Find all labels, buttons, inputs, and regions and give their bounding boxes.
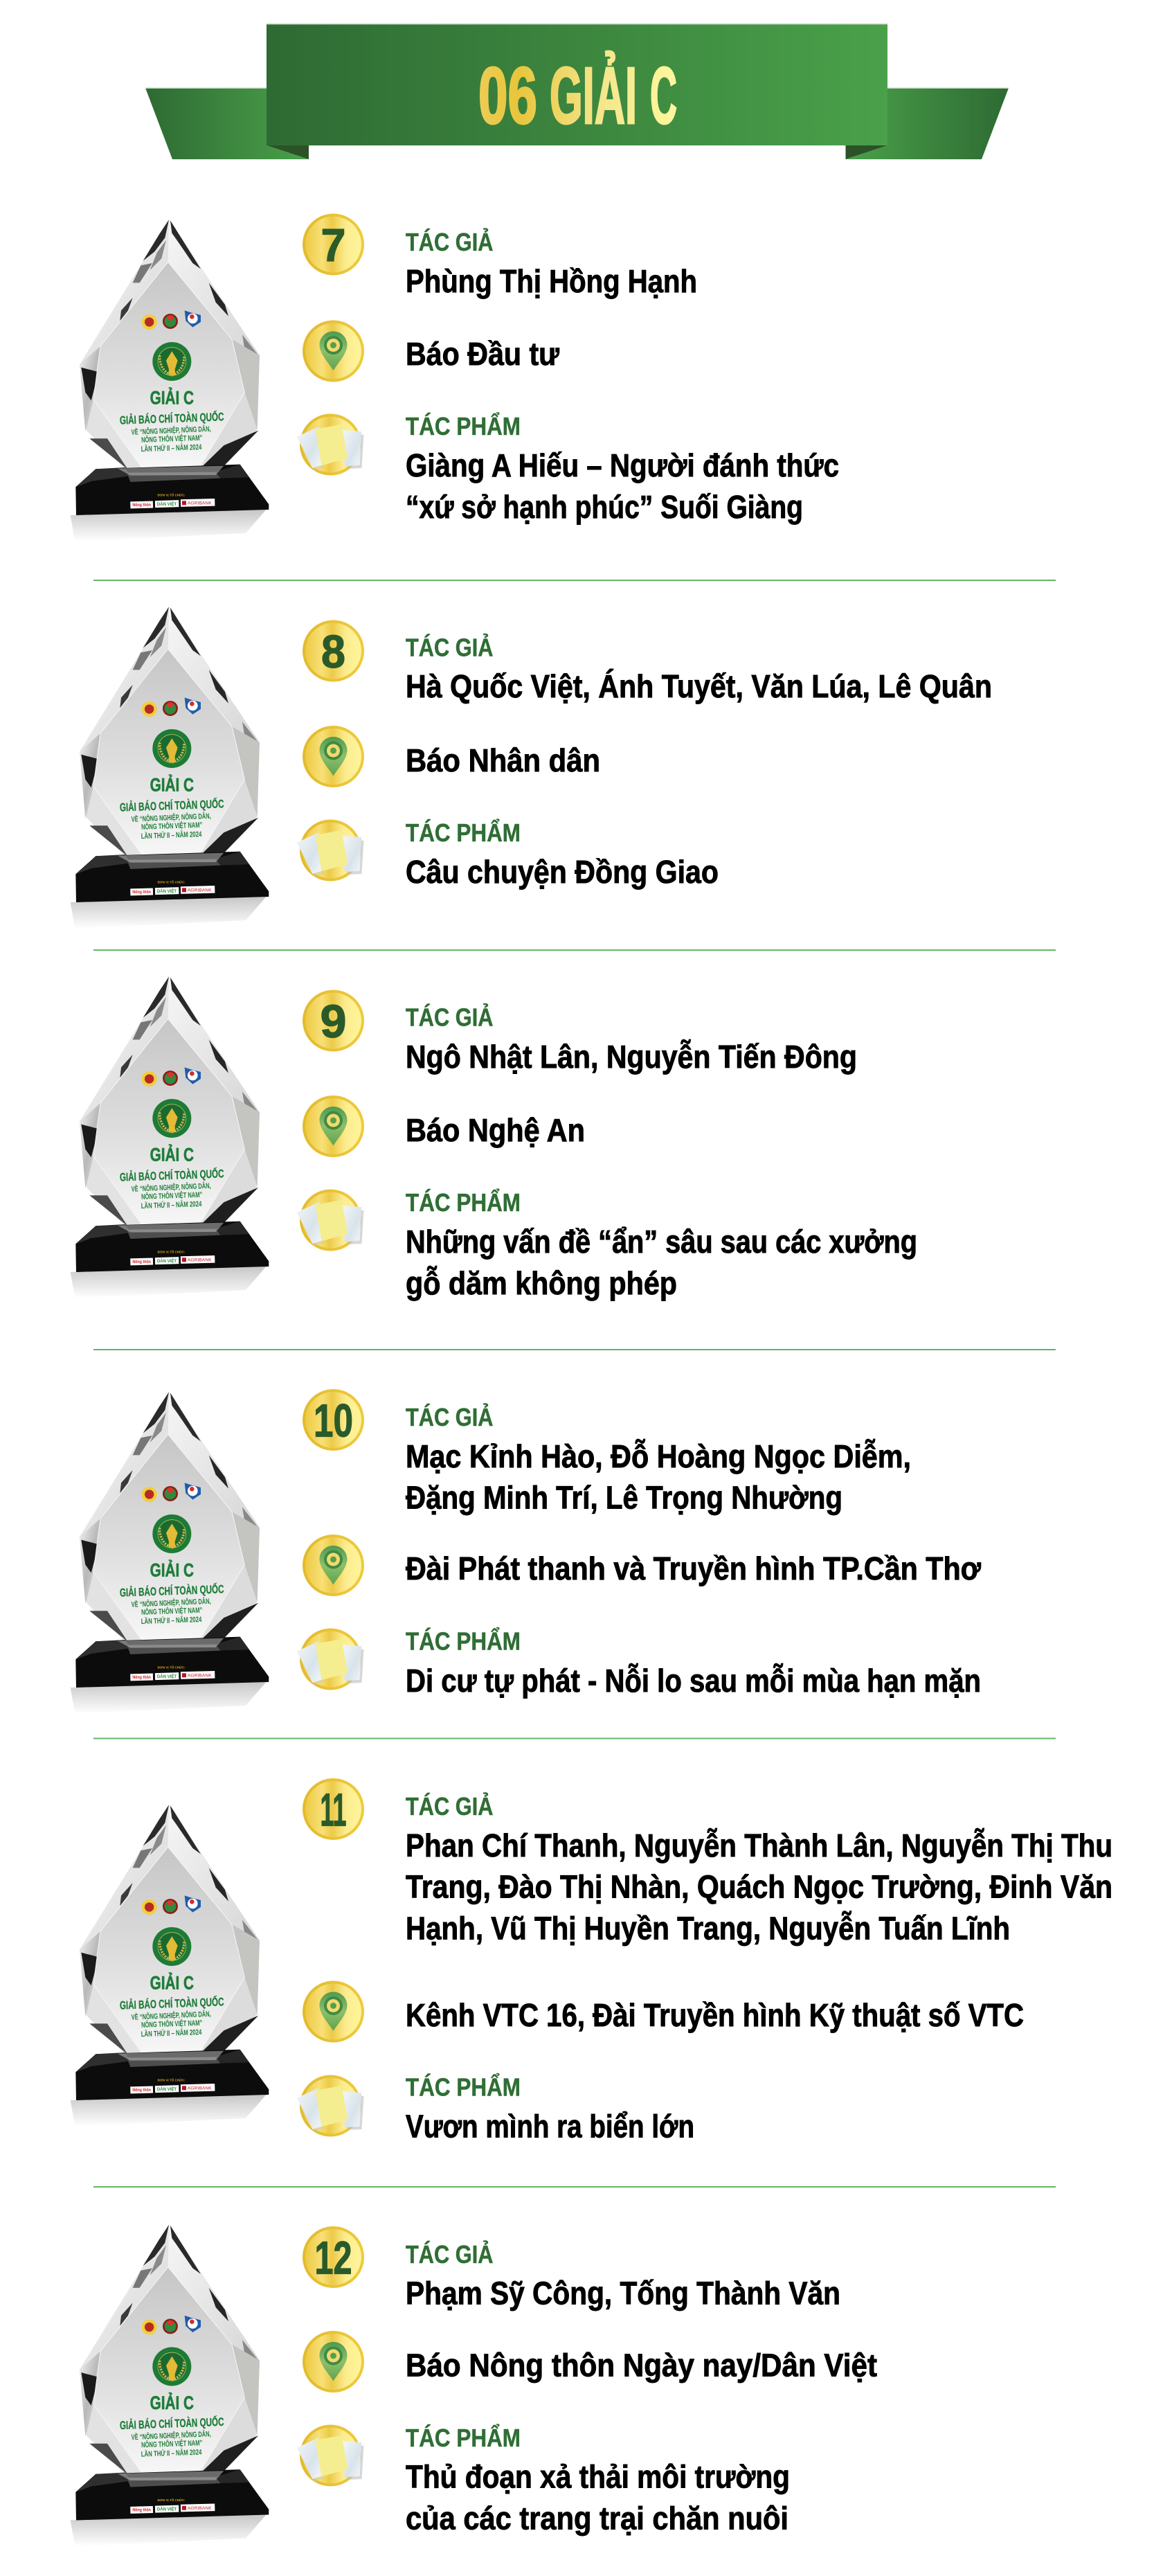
trophy 12: LẦN THỨ II – NĂM 2024 — [141, 2448, 202, 2459]
number badge 12: 12 — [314, 2233, 352, 2284]
author — [406, 1792, 1112, 1946]
title: 06 — [478, 51, 537, 141]
author: Phạm Sỹ Công, Tống Thành Văn — [406, 2275, 840, 2311]
trophy 12: DÂN VIỆT — [157, 2505, 177, 2512]
author: Mạc Kỉnh Hào, Đỗ Hoàng Ngọc Diễm, — [406, 1438, 911, 1474]
trophy 8: GIẢI BÁO CHÍ TOÀN QUỐC — [120, 796, 224, 814]
work: TÁC PHẨM — [406, 1188, 521, 1217]
trophy 12: Nông thôn — [132, 2507, 151, 2512]
title — [478, 51, 677, 141]
author: TÁC GIẢ — [406, 1003, 493, 1032]
panel: award 11 — [71, 1778, 1112, 2144]
title: GIẢI — [550, 51, 637, 141]
work — [406, 2072, 694, 2144]
trophy 11: ĐƠN VỊ TỔ CHỨC: — [158, 2078, 186, 2083]
number badge 9 — [303, 990, 364, 1051]
work: Câu chuyện Đồng Giao — [406, 854, 719, 890]
author — [406, 1403, 911, 1515]
work: Vươn mình ra biển lớn — [406, 2108, 694, 2144]
trophy 10: LẦN THỨ II – NĂM 2024 — [141, 1615, 202, 1626]
author — [406, 1003, 857, 1075]
trophy 11: AGRIBANK — [188, 2086, 212, 2091]
trophy 9: NÔNG THÔN VIỆT NAM” — [141, 1190, 203, 1201]
banner: 06 GIẢI C: C — [650, 51, 677, 141]
trophy 8: LẦN THỨ II – NĂM 2024 — [141, 830, 202, 841]
author: Đặng Minh Trí, Lê Trọng Nhường — [406, 1479, 842, 1515]
work: TÁC PHẨM — [406, 2072, 521, 2101]
number badge 11 — [303, 1778, 364, 1840]
trophy 11: NÔNG THÔN VIỆT NAM” — [141, 2019, 203, 2030]
author: Hạnh, Vũ Thị Huyền Trang, Nguyễn Tuấn Lĩnh — [406, 1910, 1010, 1946]
work — [406, 2423, 790, 2536]
author: Phùng Thị Hồng Hạnh — [406, 263, 697, 299]
trophy 7: AGRIBANK — [188, 501, 212, 506]
outlet: Báo Nhân dân — [406, 742, 600, 778]
icon: location pin — [303, 320, 364, 382]
trophy 9: Nông thôn — [132, 1260, 151, 1264]
trophy 7: NÔNG THÔN VIỆT NAM” — [141, 433, 203, 445]
trophy 9: GIẢI BÁO CHÍ TOÀN QUỐC — [120, 1166, 224, 1184]
author: TÁC GIẢ — [406, 228, 493, 256]
trophy 10: VỀ “NÔNG NGHIỆP, NÔNG DÂN, — [131, 1597, 211, 1609]
icon: location pin — [303, 1095, 364, 1157]
trophy 11: LẦN THỨ II – NĂM 2024 — [141, 2028, 202, 2039]
number badge 9: 9 — [320, 996, 346, 1048]
work: gỗ dăm không phép — [406, 1265, 677, 1301]
author: TÁC GIẢ — [406, 1403, 493, 1431]
outlet: Đài Phát thanh và Truyền hình TP.Cần Thơ — [406, 1550, 981, 1586]
trophy 9: GIẢI C — [150, 1143, 194, 1165]
trophy 7: ĐƠN VỊ TỔ CHỨC: — [158, 493, 186, 498]
work: của các trang trại chăn nuôi — [406, 2500, 788, 2536]
number badge 10: 10 — [314, 1395, 353, 1447]
trophy 12: VỀ “NÔNG NGHIỆP, NÔNG DÂN, — [131, 2429, 211, 2442]
panel: award 7 — [71, 213, 839, 542]
trophy 8: AGRIBANK — [188, 888, 212, 893]
trophy 8: VỀ “NÔNG NGHIỆP, NÔNG DÂN, — [131, 812, 211, 824]
trophy 10: GIẢI BÁO CHÍ TOÀN QUỐC — [120, 1582, 224, 1600]
right ribbon wing — [846, 87, 1009, 159]
trophy 10: NÔNG THÔN VIỆT NAM” — [141, 1606, 203, 1617]
icon: papers — [297, 414, 364, 475]
number badge 8: 8 — [321, 626, 345, 678]
icon: location pin — [303, 1980, 364, 2043]
trophy 12: AGRIBANK — [188, 2506, 212, 2511]
trophy 7: GIẢI BÁO CHÍ TOÀN QUỐC — [120, 409, 224, 427]
main ribbon — [267, 24, 887, 145]
outlet: Báo Nghệ An — [406, 1112, 585, 1148]
work: “xứ sở hạnh phúc” Suối Giàng — [406, 489, 803, 525]
number badge 10 — [303, 1389, 364, 1451]
trophy 7: VỀ “NÔNG NGHIỆP, NÔNG DÂN, — [131, 424, 211, 437]
icon: papers — [297, 820, 364, 881]
panel: award 8 — [71, 607, 992, 929]
icon: papers — [297, 1190, 364, 1251]
work: Những vấn đề “ẩn” sâu sau các xưởng — [406, 1224, 917, 1260]
panel: award 10 — [71, 1389, 981, 1714]
trophy 8 — [71, 607, 269, 929]
outlet: Kênh VTC 16, Đài Truyền hình Kỹ thuật số VTC — [406, 1997, 1024, 2033]
trophy 11 — [71, 1805, 269, 2127]
icon: papers — [297, 2075, 364, 2137]
author — [406, 633, 992, 704]
icon: location pin — [303, 726, 364, 787]
trophy 7 — [71, 220, 269, 542]
author — [406, 2240, 840, 2311]
work: Giàng A Hiếu – Người đánh thức — [406, 447, 839, 483]
trophy 8: ĐƠN VỊ TỔ CHỨC: — [158, 880, 186, 885]
trophy 12: ĐƠN VỊ TỔ CHỨC: — [158, 2498, 186, 2503]
icon: papers — [297, 2425, 364, 2486]
trophy 8: Nông thôn — [132, 890, 151, 895]
trophy 9 — [71, 976, 269, 1298]
work: Di cư tự phát - Nỗi lo sau mỗi mùa hạn mặn — [406, 1663, 981, 1699]
left ribbon wing — [145, 87, 309, 159]
work: TÁC PHẨM — [406, 818, 521, 847]
number badge 8 — [303, 620, 364, 681]
work — [406, 1626, 981, 1699]
trophy 7: DÂN VIỆT — [157, 501, 177, 507]
icon: papers — [297, 1629, 364, 1690]
number badge 7 — [303, 213, 364, 276]
trophy 9: LẦN THỨ II – NĂM 2024 — [141, 1199, 202, 1210]
trophy 8: DÂN VIỆT — [157, 888, 177, 894]
trophy 11: Nông thôn — [132, 2088, 151, 2093]
work: Thủ đoạn xả thải môi trường — [406, 2458, 790, 2494]
author — [406, 228, 697, 299]
trophy 9: VỀ “NÔNG NGHIỆP, NÔNG DÂN, — [131, 1181, 211, 1194]
banner: 06 GIẢI C — [145, 24, 1009, 159]
trophy 9: AGRIBANK — [188, 1258, 212, 1263]
author: Hà Quốc Việt, Ánh Tuyết, Văn Lúa, Lê Quân — [406, 668, 992, 704]
icon: location pin — [303, 2331, 364, 2392]
trophy 11: GIẢI C — [150, 1971, 194, 1993]
trophy 8: NÔNG THÔN VIỆT NAM” — [141, 821, 203, 832]
trophy 7: Nông thôn — [132, 503, 151, 508]
trophy 11: VỀ “NÔNG NGHIỆP, NÔNG DÂN, — [131, 2010, 211, 2022]
trophy 12: GIẢI C — [150, 2391, 194, 2413]
work: TÁC PHẨM — [406, 411, 521, 440]
number badge 7: 7 — [321, 220, 346, 271]
trophy 10 — [71, 1392, 269, 1714]
trophy 10: AGRIBANK — [188, 1674, 212, 1679]
number badge 11: 11 — [320, 1784, 346, 1836]
trophy 11: DÂN VIỆT — [157, 2086, 177, 2092]
author: Ngô Nhật Lân, Nguyễn Tiến Đông — [406, 1039, 857, 1075]
number badge 12 — [303, 2226, 364, 2288]
trophy 12: GIẢI BÁO CHÍ TOÀN QUỐC — [120, 2415, 224, 2432]
trophy 12: NÔNG THÔN VIỆT NAM” — [141, 2438, 203, 2449]
trophy 10: Nông thôn — [132, 1675, 151, 1680]
work — [406, 1188, 917, 1301]
work — [406, 411, 839, 525]
trophy 10: DÂN VIỆT — [157, 1673, 177, 1679]
trophy 9: ĐƠN VỊ TỔ CHỨC: — [158, 1250, 186, 1255]
work: TÁC PHẨM — [406, 1626, 521, 1655]
panel: award 12 — [71, 2224, 877, 2546]
trophy 7: LẦN THỨ II – NĂM 2024 — [141, 442, 202, 454]
trophy 11: GIẢI BÁO CHÍ TOÀN QUỐC — [120, 1994, 224, 2012]
author: TÁC GIẢ — [406, 2240, 493, 2269]
panel: award 9 — [71, 976, 917, 1301]
author: TÁC GIẢ — [406, 633, 493, 662]
outlet: Báo Đầu tư — [406, 336, 560, 372]
work — [406, 818, 719, 890]
trophy 10: ĐƠN VỊ TỔ CHỨC: — [158, 1665, 186, 1670]
trophy 7: GIẢI C — [150, 386, 194, 408]
author: TÁC GIẢ — [406, 1792, 493, 1821]
trophy 9: DÂN VIỆT — [157, 1258, 177, 1264]
trophy 12 — [71, 2224, 269, 2546]
outlet: Báo Nông thôn Ngày nay/Dân Việt — [406, 2347, 877, 2383]
trophy 10: GIẢI C — [150, 1558, 194, 1580]
trophy 8: GIẢI C — [150, 773, 194, 795]
icon: location pin — [303, 1535, 364, 1596]
work: TÁC PHẨM — [406, 2423, 521, 2452]
